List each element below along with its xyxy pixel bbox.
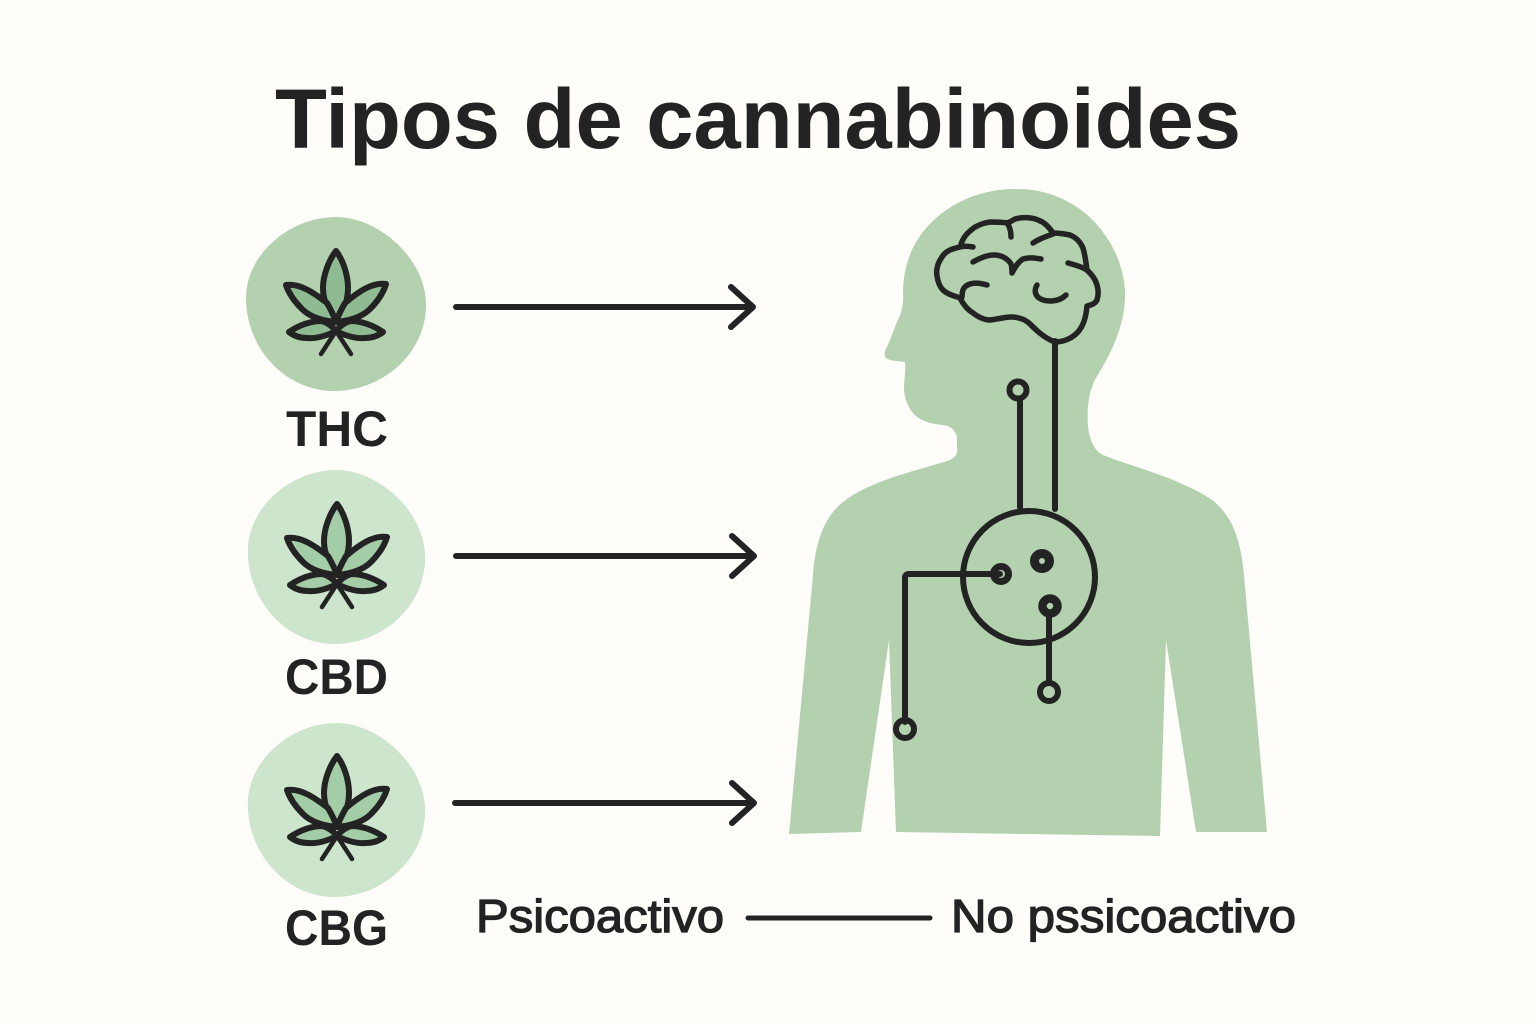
human body silhouette (789, 189, 1267, 836)
legend line (748, 916, 930, 920)
title: Tipos de cannabinoides (275, 72, 1241, 166)
icon: THC cannabis leaf (286, 251, 386, 354)
arrow: THC to body (456, 287, 753, 327)
label: CBG: CBG (285, 900, 388, 956)
label: THC: THC (286, 401, 388, 457)
connector: brain to receptor hub (1052, 341, 1058, 509)
connector: lower node (1040, 598, 1058, 701)
icon: CBD circle (248, 470, 425, 644)
connector: left node (896, 566, 1008, 738)
legend label: non-psychoactive: No pssicoactivo (951, 890, 1296, 942)
legend label: psychoactive: Psicoactivo (476, 890, 724, 942)
neural connector lines (896, 341, 1095, 738)
panel: THC (246, 217, 426, 457)
receptor dot (1034, 554, 1050, 568)
panel: CBG (248, 723, 425, 956)
icon: CBG cannabis leaf (287, 756, 387, 859)
panel: CBD (248, 470, 425, 705)
icon: CBD cannabis leaf (287, 504, 387, 607)
legend: psychoactivity scale (476, 890, 1296, 942)
receptor hub circle (963, 511, 1095, 643)
arrow: CBD to body (456, 536, 754, 576)
icon: THC circle (246, 217, 426, 391)
icon: CBG circle (248, 723, 425, 897)
label: CBD: CBD (285, 649, 388, 705)
arrow: CBG to body (455, 783, 754, 823)
connector: upper node (1010, 382, 1026, 507)
icon: brain (937, 218, 1098, 342)
